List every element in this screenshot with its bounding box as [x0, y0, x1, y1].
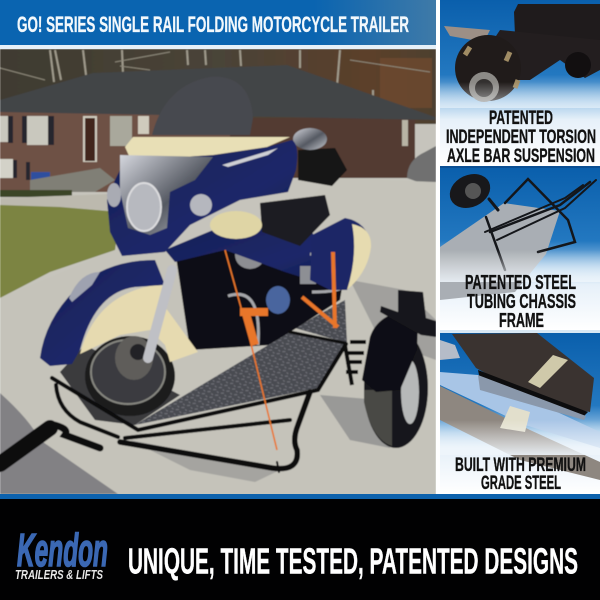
panel: premium grade steel [440, 333, 600, 494]
front wheel [85, 336, 175, 416]
fork [148, 270, 172, 358]
windshield [152, 77, 253, 135]
suspension [345, 342, 366, 385]
motorcycle engine and frame [165, 225, 345, 350]
footer band [0, 499, 600, 600]
logo: Kendon: Kendon [17, 524, 108, 576]
hedge [0, 190, 72, 197]
panel text [446, 107, 596, 167]
panel text: PATENTED [489, 107, 553, 129]
orange tie-down straps [225, 250, 338, 450]
right column background [436, 0, 600, 495]
ground shadows [0, 280, 436, 494]
panel: steel tubing chassis [440, 168, 600, 332]
trailer frame [0, 332, 346, 472]
icon: welded steel rail [440, 333, 600, 480]
trailer tail light [380, 290, 436, 337]
logo: Kendon [15, 524, 108, 582]
panel text [465, 272, 576, 332]
photo: motorcycle on trailer [0, 45, 436, 495]
saddlebag [310, 218, 371, 290]
mirror [293, 128, 327, 150]
sidewalk [0, 194, 115, 211]
fairing [107, 137, 297, 256]
lawn [0, 205, 120, 298]
background trees [0, 49, 436, 124]
parked car [407, 146, 436, 184]
icon: chassis frame with deck plate [440, 168, 600, 300]
panel text: FRAME [499, 310, 544, 332]
right trailer wheel [362, 315, 428, 448]
driveway [0, 178, 436, 494]
trailer rear deck [295, 300, 347, 343]
house walls [0, 110, 415, 192]
tank cream panel [210, 211, 262, 239]
seat back [298, 148, 347, 186]
seat [260, 195, 330, 246]
panel text [455, 454, 586, 494]
under-wheel cradle [60, 345, 180, 425]
logo: Kendon: TRAILERS & LIFTS [15, 568, 104, 582]
trailer deck [135, 332, 347, 425]
header banner [0, 0, 436, 49]
icon: torsion axle hub [440, 4, 600, 108]
front fender [40, 260, 198, 366]
roof [0, 65, 435, 120]
panel: torsion axle suspension [440, 0, 600, 167]
blue divider strip [0, 494, 600, 499]
